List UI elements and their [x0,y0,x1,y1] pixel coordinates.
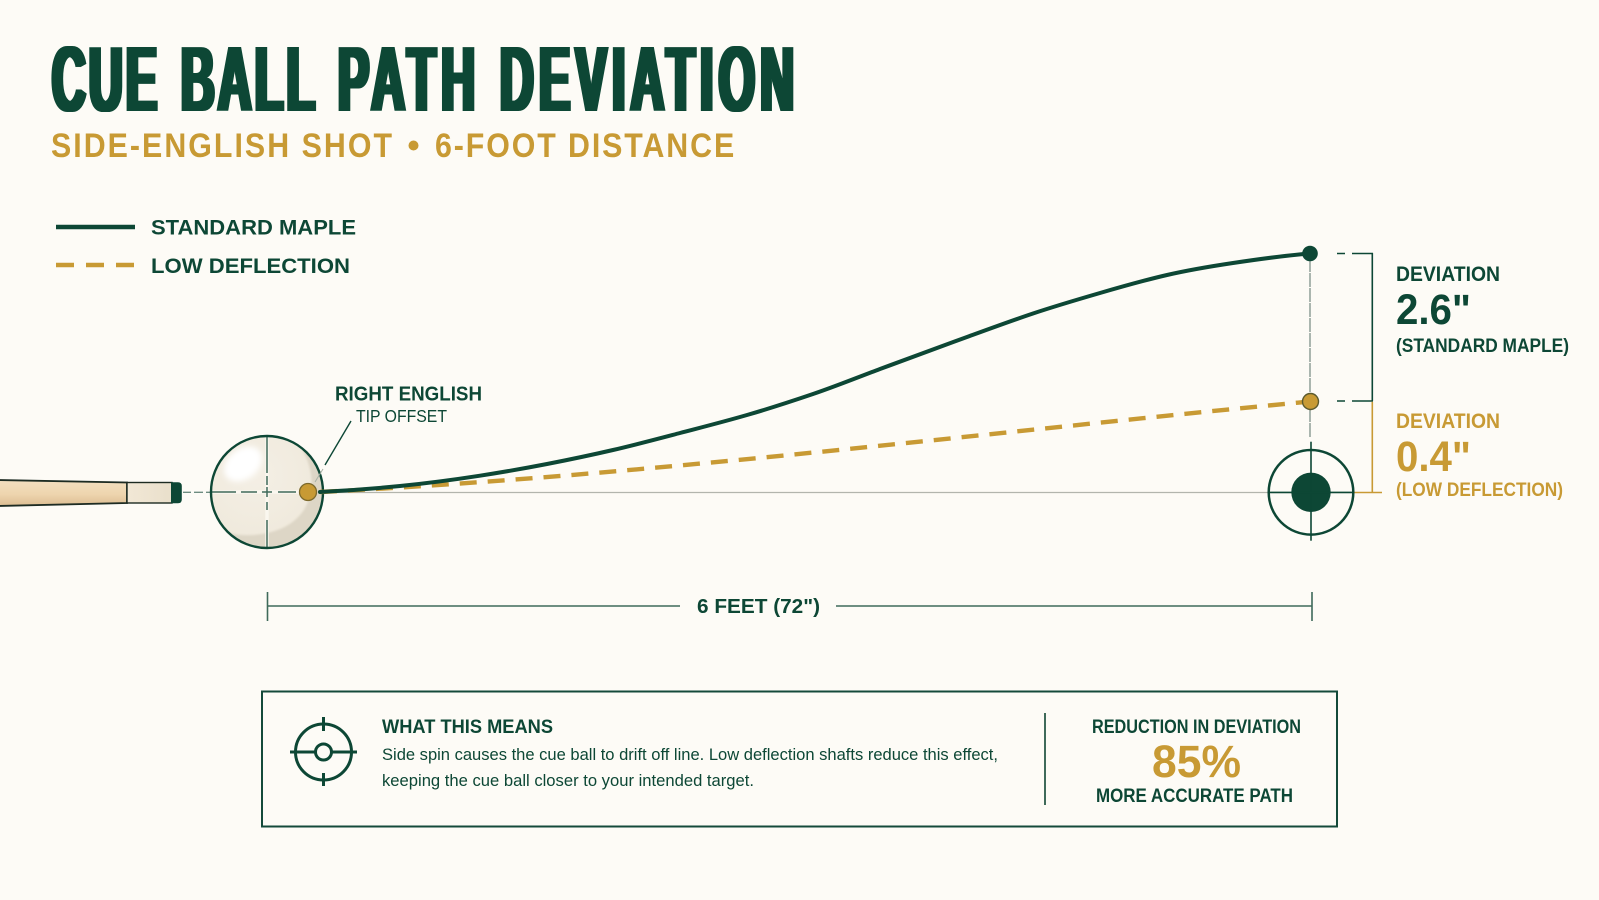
callout: low deflection deviation: DEVIATION [1396,410,1500,433]
legend: standard maple label: STANDARD MAPLE [151,216,356,240]
legend: low deflection line [56,263,135,267]
deviation bracket: standard maple [1337,253,1373,401]
stat: reduction in deviation [1092,717,1301,807]
cue ferrule [127,482,172,503]
right english label: RIGHT ENGLISH [335,382,482,406]
callout: low deflection deviation: 0.4" [1396,434,1471,481]
panel divider [1044,713,1046,805]
low deflection path [320,402,1310,492]
tip offset leader line [315,421,351,482]
vertical drop line [1309,258,1311,438]
stat: reduction in deviation: MORE ACCURATE PATH [1096,785,1293,807]
tip offset label: TIP OFFSET [356,406,447,426]
tip contact dot [300,484,316,500]
callout: low deflection deviation [1396,410,1563,501]
distance label: 6 FEET (72") [697,595,820,618]
target [1269,442,1353,541]
cue ball [210,434,324,550]
panel heading: WHAT THIS MEANS [382,716,553,738]
callout: standard maple deviation [1396,263,1569,357]
end point: standard maple [1302,246,1318,261]
subtitle: SIDE-ENGLISH SHOT [51,126,392,164]
callout: standard maple deviation: (STANDARD MAPLE) [1396,335,1569,357]
stat: reduction in deviation: REDUCTION IN DEVIATION [1092,717,1301,738]
panel body text: keeping the cue ball closer to your intended target. [382,771,754,790]
standard maple path [320,254,1310,492]
callout: standard maple deviation: 2.6" [1396,287,1471,334]
title [52,26,794,131]
subtitle [51,126,734,164]
callout: low deflection deviation: (LOW DEFLECTION) [1396,479,1563,501]
stat: reduction in deviation: 85% [1152,736,1241,787]
panel body text [382,745,998,790]
icon: crosshair [290,717,357,786]
callout: standard maple deviation: DEVIATION [1396,263,1500,286]
subtitle: 6-FOOT DISTANCE [435,126,734,164]
aiming dashes to ball [183,491,211,493]
cue stick [0,480,182,506]
legend [56,216,356,278]
center reference line [320,492,1382,494]
legend: low deflection label: LOW DEFLECTION [151,254,350,278]
cue tip [171,482,182,503]
end point: low deflection [1302,394,1318,410]
legend: standard maple line [56,225,135,229]
title: BALL [181,26,315,131]
title: CUE [52,26,157,131]
deviation bracket: low deflection [1371,402,1373,492]
title: DEVIATION [500,26,794,131]
panel body text: Side spin causes the cue ball to drift off line. Low deflection shafts reduce this effect, [382,745,998,764]
cue shaft [0,480,127,506]
title: PATH [338,26,475,131]
panel: what this means [262,692,1337,826]
